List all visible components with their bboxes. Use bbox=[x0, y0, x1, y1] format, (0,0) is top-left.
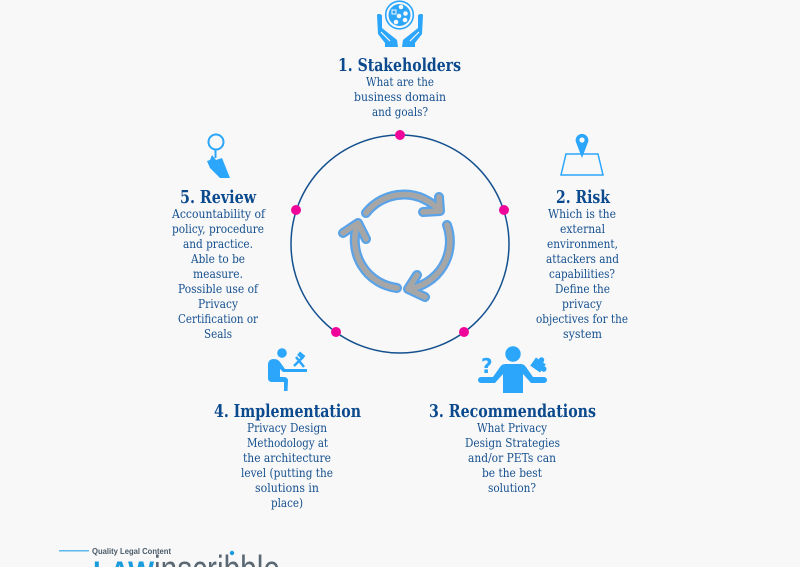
logo bbox=[59, 547, 280, 567]
heading and text: review: policy, procedure bbox=[172, 221, 264, 236]
heading and text: risk: system bbox=[563, 326, 602, 341]
icon: cycle arrows bbox=[343, 195, 450, 297]
heading and text: recommendations: Design Strategies bbox=[465, 435, 560, 450]
heading and text: implementation: Methodology at bbox=[247, 435, 328, 450]
heading and text: review: Privacy bbox=[198, 296, 239, 311]
heading and text: risk bbox=[536, 187, 628, 341]
heading and text: risk: objectives for the bbox=[536, 311, 628, 326]
icon: person at desk with tools bbox=[268, 348, 307, 391]
central ring with node dots bbox=[291, 130, 509, 353]
heading and text: implementation: place) bbox=[271, 495, 303, 510]
heading and text: review: Seals bbox=[204, 326, 232, 341]
heading and text: recommendations: 3. Recommendations bbox=[429, 401, 596, 422]
heading and text: implementation: the architecture bbox=[243, 450, 331, 465]
heading and text: review: and practice. bbox=[183, 236, 253, 251]
heading and text: risk: Define the bbox=[555, 281, 610, 296]
heading and text: implementation bbox=[214, 401, 361, 510]
heading and text: risk: environment, bbox=[547, 236, 618, 251]
heading and text: review: Certification or bbox=[178, 311, 258, 326]
heading and text: review: Possible use of bbox=[178, 281, 259, 296]
icon: person shrugging with question and puzzle: ? bbox=[481, 354, 493, 378]
heading and text: stakeholders bbox=[338, 55, 461, 119]
heading and text: stakeholders: and goals? bbox=[372, 104, 428, 119]
icon: map pin bbox=[561, 134, 603, 175]
heading and text: risk: privacy bbox=[562, 296, 603, 311]
heading and text: recommendations: and/or PETs can bbox=[468, 450, 556, 465]
icon: person shrugging with question and puzzle bbox=[478, 346, 551, 393]
heading and text: stakeholders: business domain bbox=[354, 89, 446, 104]
heading and text: recommendations: be the best bbox=[482, 465, 542, 480]
icon: hand with magnifier bbox=[207, 134, 230, 178]
icon: hands holding globe bbox=[377, 1, 423, 47]
heading and text: review: measure. bbox=[193, 266, 243, 281]
heading and text: review: 5. Review bbox=[180, 187, 256, 208]
logo: Quality Legal Content bbox=[92, 547, 171, 556]
heading and text: recommendations bbox=[429, 401, 596, 495]
heading and text: risk: capabilities? bbox=[549, 266, 615, 281]
heading and text: implementation: Privacy Design bbox=[247, 420, 327, 435]
heading and text: recommendations: What Privacy bbox=[477, 420, 548, 435]
heading and text: stakeholders: 1. Stakeholders bbox=[338, 55, 461, 76]
heading and text: review: Able to be bbox=[190, 251, 245, 266]
heading and text: stakeholders: What are the bbox=[366, 74, 434, 89]
heading and text: risk: attackers and bbox=[546, 251, 619, 266]
heading and text: recommendations: solution? bbox=[488, 480, 536, 495]
heading and text: risk: Which is the bbox=[548, 206, 616, 221]
heading and text: review bbox=[171, 187, 266, 341]
heading and text: implementation: level (putting the bbox=[241, 465, 333, 480]
heading and text: implementation: solutions in bbox=[255, 480, 319, 495]
heading and text: risk: external bbox=[560, 221, 605, 236]
heading and text: risk: 2. Risk bbox=[556, 187, 610, 208]
heading and text: review: Accountability of bbox=[171, 206, 266, 221]
heading and text: implementation: 4. Implementation bbox=[214, 401, 361, 422]
